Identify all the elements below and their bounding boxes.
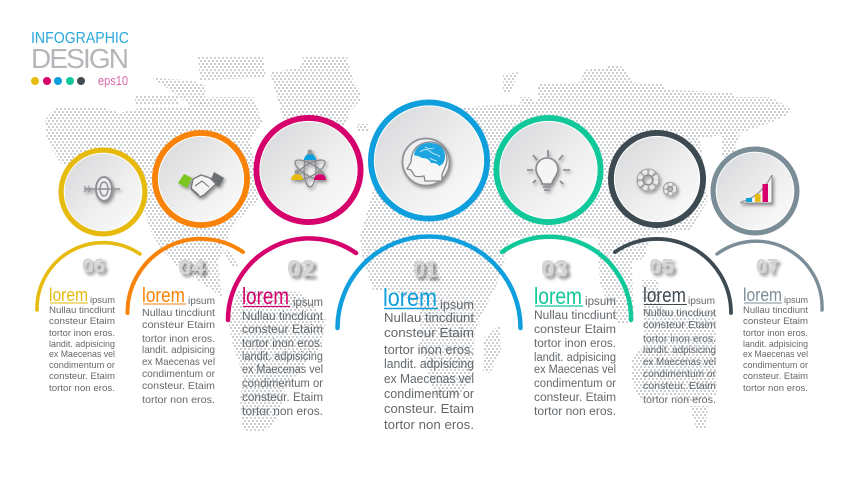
body text: landit. adpisicing bbox=[743, 339, 808, 350]
yellow arc bbox=[37, 243, 140, 310]
blue arc bbox=[338, 237, 520, 328]
body text: ex Maecenas vel bbox=[142, 356, 215, 368]
body text: tortor non eros. bbox=[643, 394, 716, 406]
body text: landit. adpisicing bbox=[384, 357, 474, 371]
body text: Nullau tincdiunt bbox=[384, 311, 475, 325]
body text: consteur Etaim bbox=[142, 319, 215, 331]
body text: Nullau tincdiunt bbox=[49, 305, 115, 316]
icon: gears bbox=[638, 170, 676, 196]
heading: ipsum bbox=[188, 295, 215, 307]
icon: atom with people bbox=[291, 150, 328, 187]
icon: light bulb bbox=[527, 150, 570, 190]
body text: consteur. Etaim bbox=[534, 392, 616, 404]
number 02: 02 bbox=[287, 255, 315, 281]
body text bbox=[49, 305, 115, 394]
body text: ex Maecenas vel bbox=[534, 364, 616, 376]
body text: consteur Etaim bbox=[242, 324, 323, 336]
number 04: 04 bbox=[178, 256, 205, 279]
body text: consteur. Etaim bbox=[384, 402, 474, 416]
body text: consteur. Etaim bbox=[643, 380, 716, 392]
heading: lorem bbox=[743, 285, 782, 305]
orange ring bbox=[155, 133, 247, 225]
body text: tortor non eros. bbox=[49, 383, 115, 394]
heading: ipsum bbox=[440, 298, 474, 312]
body text: condimentum or bbox=[643, 368, 716, 380]
heading: ipsum bbox=[90, 295, 115, 306]
body text bbox=[643, 307, 716, 406]
heading: ipsum bbox=[688, 295, 715, 307]
heading bbox=[743, 285, 808, 306]
panel: step 04 bbox=[127, 133, 247, 406]
panel: step 03 bbox=[496, 118, 631, 418]
body text: condimentum or bbox=[534, 378, 616, 390]
heading bbox=[643, 285, 715, 307]
body text: Nullau tincdiunt bbox=[242, 311, 324, 323]
body text: tortor inon eros. bbox=[384, 343, 474, 357]
title: infographic: INFOGRAPHIC bbox=[31, 30, 129, 47]
heading: ipsum bbox=[784, 295, 808, 306]
body text: Nullau tincdiunt bbox=[534, 310, 617, 322]
body text: tortor inon eros. bbox=[142, 333, 215, 345]
green ring bbox=[496, 118, 600, 222]
body text: Nullau tincdiunt bbox=[743, 305, 808, 316]
body text: consteur Etaim bbox=[643, 319, 716, 331]
body text: ex Maecenas vel bbox=[49, 349, 115, 360]
body text bbox=[242, 311, 324, 418]
body text: consteur. Etaim bbox=[242, 392, 323, 404]
icon: bar chart bbox=[741, 175, 772, 203]
body text: tortor non eros. bbox=[242, 406, 323, 418]
body text: condimentum or bbox=[142, 368, 215, 380]
icon: head with brain bbox=[402, 138, 450, 186]
dark arc bbox=[615, 239, 731, 313]
body text: condimentum or bbox=[49, 360, 115, 371]
body text: Nullau tincdiunt bbox=[142, 307, 215, 319]
body text: tortor non eros. bbox=[743, 383, 808, 394]
gray arc bbox=[717, 241, 822, 310]
world map of dots bbox=[45, 57, 791, 432]
heading: ipsum bbox=[293, 297, 323, 309]
body text: consteur Etaim bbox=[534, 324, 616, 336]
blue ring bbox=[371, 102, 487, 218]
heading: lorem bbox=[142, 285, 185, 307]
heading: lorem bbox=[242, 283, 289, 309]
body text: tortor non eros. bbox=[534, 406, 616, 418]
number 05: 05 bbox=[649, 256, 674, 278]
body text bbox=[142, 307, 215, 406]
panel: step 07 bbox=[713, 149, 822, 394]
panel: step 01 bbox=[338, 102, 520, 432]
heading: lorem bbox=[643, 285, 686, 307]
body text: landit. adpisicing bbox=[242, 351, 323, 363]
title block bbox=[31, 30, 129, 88]
body text: condimentum or bbox=[242, 378, 323, 390]
body text: landit. adpisicing bbox=[49, 339, 115, 350]
heading: ipsum bbox=[585, 296, 616, 308]
heading: lorem bbox=[383, 284, 437, 312]
body text: tortor inon eros. bbox=[49, 328, 115, 339]
pink arc bbox=[228, 238, 356, 320]
panel: step 05 bbox=[611, 133, 731, 406]
body text bbox=[743, 305, 808, 394]
heading bbox=[142, 285, 215, 307]
body text: consteur Etaim bbox=[743, 316, 808, 327]
number 01: 01 bbox=[413, 256, 437, 283]
panel: step 02 bbox=[228, 118, 360, 418]
green arc bbox=[502, 237, 631, 320]
body text: ex Maecenas vel bbox=[643, 356, 716, 368]
number 03: 03 bbox=[541, 255, 568, 281]
pink ring bbox=[256, 118, 360, 222]
body text: tortor non eros. bbox=[384, 418, 474, 432]
body text: consteur. Etaim bbox=[743, 371, 808, 382]
body text: tortor inon eros. bbox=[743, 328, 808, 339]
body text: ex Maecenas vel bbox=[743, 349, 808, 360]
body text: tortor inon eros. bbox=[534, 338, 616, 350]
body text: tortor inon eros. bbox=[242, 338, 323, 350]
gray ring bbox=[713, 149, 797, 233]
heading bbox=[383, 284, 474, 312]
body text: consteur. Etaim bbox=[49, 371, 115, 382]
eps label: eps10 bbox=[98, 73, 128, 88]
body text: landit. adpisicing bbox=[643, 344, 716, 356]
body text: consteur. Etaim bbox=[142, 380, 215, 392]
body text: consteur Etaim bbox=[49, 316, 115, 327]
body text: consteur Etaim bbox=[384, 326, 474, 340]
title: design: DESIGN bbox=[31, 43, 129, 74]
heading: lorem bbox=[534, 283, 582, 309]
body text: Nullau tincdiunt bbox=[643, 307, 716, 319]
body text: ex Maecenas vel bbox=[242, 364, 323, 376]
number 07: 07 bbox=[756, 256, 778, 278]
body text bbox=[534, 310, 617, 418]
heading: lorem bbox=[49, 285, 88, 305]
panel: step 06 bbox=[37, 150, 145, 394]
body text: landit. adpisicing bbox=[142, 344, 215, 356]
body text: condimentum or bbox=[743, 360, 808, 371]
dark ring bbox=[611, 133, 703, 225]
body text: tortor inon eros. bbox=[643, 333, 716, 345]
heading bbox=[49, 285, 115, 306]
colour dots bbox=[31, 77, 85, 85]
body text: tortor non eros. bbox=[142, 394, 215, 406]
icon: handshake bbox=[178, 172, 224, 197]
icon: target with arrow bbox=[84, 177, 120, 201]
body text: ex Maecenas vel bbox=[384, 372, 474, 386]
orange arc bbox=[127, 239, 243, 313]
body text: landit. adpisicing bbox=[534, 352, 616, 364]
body text bbox=[384, 311, 475, 432]
number 06: 06 bbox=[82, 256, 105, 277]
body text: condimentum or bbox=[384, 387, 474, 401]
yellow ring bbox=[61, 150, 145, 234]
